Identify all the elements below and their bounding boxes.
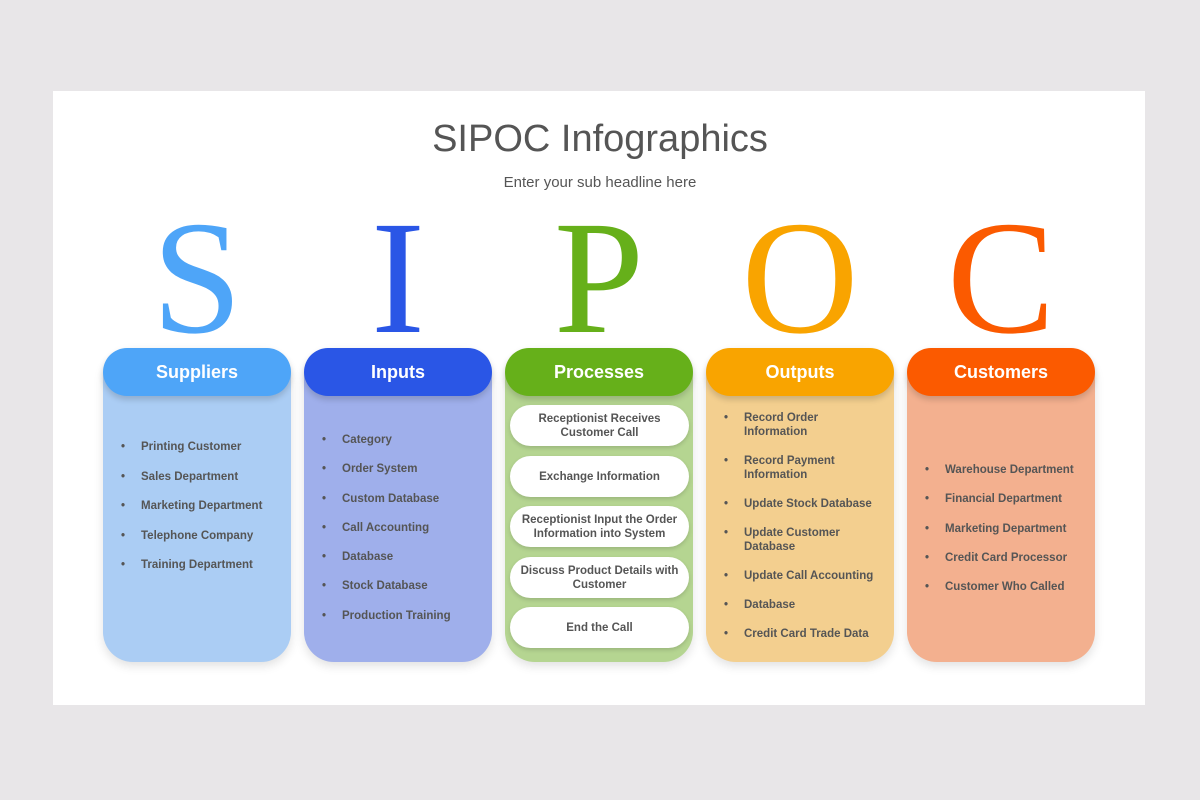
panel: inputs — [304, 348, 492, 662]
letter I: I — [371, 189, 425, 368]
list: customers: Marketing Department — [945, 523, 1066, 535]
list: suppliers: Printing Customer — [141, 441, 241, 453]
list: outputs: Information — [744, 469, 807, 481]
step 4: Discuss Product Details with — [521, 564, 678, 576]
step 4: Customer — [573, 578, 626, 590]
header: customers: Customers — [954, 362, 1048, 382]
panel: suppliers — [103, 348, 291, 662]
list: outputs: Update Call Accounting — [744, 570, 873, 582]
step 2: Exchange Information — [539, 470, 660, 482]
header: suppliers: Suppliers — [156, 362, 238, 382]
step 2 — [510, 456, 689, 497]
list: suppliers: Training Department — [141, 559, 253, 571]
list: outputs: Update Stock Database — [744, 498, 872, 510]
header: outputs — [706, 348, 894, 396]
list: outputs: Record Order — [744, 412, 818, 424]
list: inputs: Category — [342, 434, 392, 446]
list: inputs: Database — [342, 551, 393, 563]
list: customers — [925, 464, 1074, 593]
header: inputs: Inputs — [371, 362, 425, 382]
step 1: Receptionist Receives — [538, 412, 661, 424]
step 3: Receptionist Input the Order — [522, 514, 677, 526]
header: outputs: Outputs — [766, 362, 834, 382]
step 5: End the Call — [566, 622, 633, 634]
step 3: Information into System — [534, 528, 665, 540]
panel: processes — [505, 348, 693, 662]
list: customers: Financial Department — [945, 493, 1062, 505]
list: customers: Credit Card Processor — [945, 552, 1067, 564]
list: inputs — [322, 434, 451, 622]
step 1: Customer Call — [561, 426, 638, 438]
list: outputs — [724, 412, 873, 640]
list: suppliers: Telephone Company — [141, 530, 253, 542]
step 5 — [510, 607, 689, 648]
list: inputs: Order System — [342, 463, 417, 475]
list: suppliers: Sales Department — [141, 470, 238, 482]
panel: customers — [907, 348, 1095, 662]
list: inputs: Production Training — [342, 610, 451, 622]
letter O: O — [742, 189, 858, 368]
list: outputs: Update Customer — [744, 527, 840, 539]
header: processes: Processes — [554, 362, 644, 382]
list: inputs: Stock Database — [342, 580, 428, 592]
list: outputs: Record Payment — [744, 455, 835, 467]
step 1 — [510, 405, 689, 446]
list: suppliers — [121, 441, 262, 571]
header: inputs — [304, 348, 492, 396]
list: outputs: Information — [744, 426, 807, 438]
panel: outputs — [706, 348, 894, 662]
header: suppliers — [103, 348, 291, 396]
list: inputs: Custom Database — [342, 493, 439, 505]
letter C: C — [947, 189, 1055, 368]
header: customers — [907, 348, 1095, 396]
list: outputs: Credit Card Trade Data — [744, 628, 869, 640]
list: customers: Warehouse Department — [945, 464, 1074, 476]
title: SIPOC Infographics — [432, 118, 768, 160]
step 3 — [510, 506, 689, 547]
list: outputs: Database — [744, 599, 795, 611]
list: outputs: Database — [744, 541, 795, 553]
letter P: P — [554, 189, 644, 368]
list: inputs: Call Accounting — [342, 522, 429, 534]
letter S: S — [152, 189, 242, 368]
list: suppliers: Marketing Department — [141, 500, 262, 512]
step 4 — [510, 557, 689, 598]
list: customers: Customer Who Called — [945, 581, 1064, 593]
header: processes — [505, 348, 693, 396]
subtitle: Enter your sub headline here — [504, 174, 696, 191]
card background — [53, 91, 1145, 705]
